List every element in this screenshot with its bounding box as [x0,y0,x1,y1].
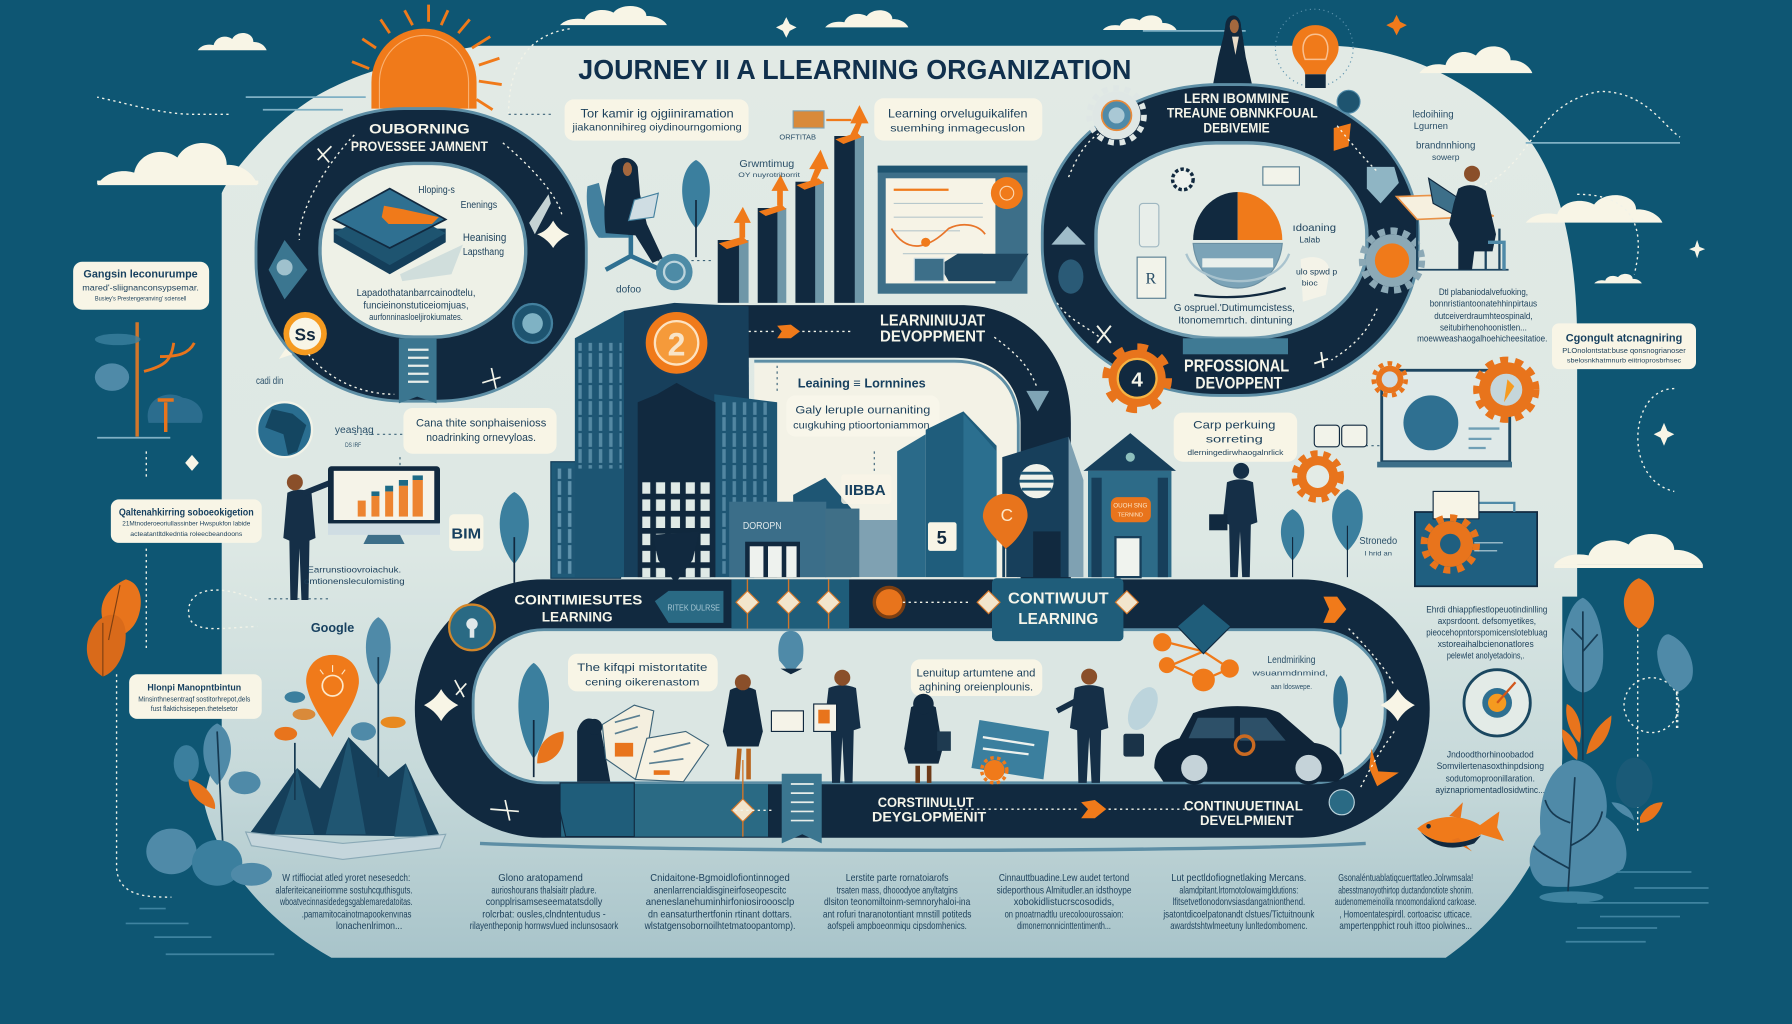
icon: small cards [1314,425,1367,447]
column 4: aofspeli ampboeonmiqu cipsdomhenics. [827,921,967,932]
icon: tree in loop [518,663,564,777]
column 5: Cinnauttbuadine.Lew audet tertond [999,873,1129,884]
big blue bush [1530,760,1626,887]
person presenting at monitor [283,474,331,600]
callout: learning lornines: cuıgkuhing ptioortoniammon. [793,421,933,432]
callout: learning organization: jiakanonnihireg oiydinourngomiong [571,122,742,133]
icon: sun [352,5,502,110]
label: IIBBA: IIBBA [845,483,886,499]
left heading: LEARNING [542,610,613,625]
icon: orange gear [1295,454,1341,499]
chart label: Grwmtimug [739,159,795,170]
icon: dark shield pin [653,531,699,583]
ring 4 heading: LERN IBOMMINE [1184,91,1289,106]
icon: building badge 2 [645,311,709,375]
loop right labels: wsuanmdnmind, [1251,668,1328,677]
callout: left top: mared'-sliignanconsypsemar. [82,282,199,292]
callout: centre left [403,408,557,454]
right paragraph lower 2: sodutomoproonillaration. [1446,774,1535,784]
column 5 [997,873,1131,932]
bottom heading 1 [872,795,987,826]
column 1: W rtiffiociat atled yroret nesesedch: [282,873,410,884]
ring 4 side labels: ıdoaning [1293,223,1336,234]
label: dofoo: dofoo [616,285,641,296]
label: IIBBA [841,474,891,504]
panel: warm centre area [754,363,1017,578]
left heading [514,593,642,625]
right paragraph lower 2: Somvilertenasoxthinpdsiong [1437,761,1544,771]
ring 4 inner oval [1096,143,1367,338]
desk labels: sowerp [1432,153,1460,162]
bottom heading 2: DEVELPMIENT [1200,813,1294,829]
ripple under loop [480,843,1366,850]
person with briefcase [1209,463,1257,577]
panel: screen with gears [1374,360,1536,467]
column 4: ant rofuri tnaranotontiant mnstill potiteds [823,910,972,921]
icon: building badge 2: 2 [668,326,685,362]
column 1: alaferiteicaneiriomme sostuhcquthisguts. [275,886,413,897]
callout: left top: Busiey's Prestengeranving' sciensell [95,296,187,303]
callout: learning lornines: Galy lerupIe ournaniting [795,405,930,417]
ring 1 labels: Enenings [461,200,497,211]
callout: left top [73,262,209,310]
dotted connector lines [97,29,1680,897]
icon: car [1154,706,1344,783]
icon: down triangle [1026,391,1049,411]
bottom heading 1: DEYGLOPMENIT [872,810,987,826]
right paragraph lower 1: xstoreaihalbcienonatlores [1438,639,1534,649]
desk labels: brandnnhiong [1416,141,1475,152]
ring 4 bottom heading: DEVOPPENT [1195,374,1282,393]
callout: handover [911,659,1042,696]
ring 1 subheading: PROVESSEE JAMNENT [351,139,488,155]
column 3: wlstatgensobornoilhtetmatoopantomp). [644,921,795,932]
small blue leaf [1657,634,1693,691]
icon: orange map pin [983,494,1028,577]
bar chart [718,105,869,303]
icon: orange fish [1417,802,1504,851]
right towers [859,411,997,577]
ring 4 side labels: Lalab [1299,235,1321,244]
column 2 [470,873,618,932]
column 2: aurioshourans thalsiaitr pladure. [491,886,597,897]
monitor caption [304,565,405,586]
callout: learning overlay: Learning orveluguikalifen [888,107,1027,121]
right paragraph: moewweashaogalhoehicheesitatioe. [1417,334,1547,344]
icon: teal badge [513,304,552,343]
icon: case by car [1123,734,1144,757]
icon: gear 4: 4 [1131,368,1143,391]
icon: speech bubble with dots [1122,683,1164,735]
ring 1 paragraph: aurfonninasloeljirokiumates. [369,312,463,322]
callout: handover: aghining oreienplounis. [919,681,1033,693]
pie chart [1186,192,1289,297]
water lines right [1566,872,1709,942]
column 7: abesstmanoyothirtop ductandonotiote shonim. [1338,886,1473,897]
right side trees [1530,578,1709,942]
label: Stronedo: I hrid an [1365,550,1392,557]
ring 1 track [256,109,586,401]
ring 4 side labels [1293,223,1337,288]
ring 4 paragraph: G ospruel.'Dutimumcistess, [1174,303,1295,314]
monitor chart [328,466,440,544]
loop right labels: aan ldoswepe. [1271,682,1312,691]
orange leaves on stem [1566,704,1581,743]
loop right labels [1251,655,1328,691]
callout: learning organization: Tor kamir ig ojgiiniramation [581,107,734,121]
icon: chair on track [560,783,634,837]
chart label: OY nuyrotriborrit [738,172,800,179]
tall blue leaf [1563,598,1603,693]
ring 1 paragraph: Lapadothatanbarrcainodtelu, [357,288,475,299]
monitor caption: Earrunstioovroiachuk. [307,565,401,575]
left icon: orange leaves [87,579,141,677]
left icon: plants at bottom [146,723,272,886]
icon: globe [257,402,312,457]
callout: left middle: Qaltenahkirring soboeokigetion [119,507,254,518]
ring 4 heading: DEBIVEMIE [1203,121,1270,136]
panel: ring 4 professional development [1042,85,1422,409]
column 6: jsatontdicoelpatonandt clstues/Tictuitnounk [1163,910,1314,921]
callout: career perking: Carp perkuing [1193,420,1275,432]
column 5: sideporthous Almitudler.an idsthoype [997,886,1131,897]
label box top [655,591,723,623]
right paragraph: Dtl plabaniodalvefuoking, [1439,287,1528,297]
panel: main light panel [203,46,1577,958]
callout: handover: Lenuitup artumtene and [917,668,1035,680]
ring 4 inner icons [1137,167,1329,302]
callout: left lower: Hlonpi Manopntbintun [147,682,242,692]
temple: OUOH SNG [1113,502,1147,509]
label: number 5 box [928,522,957,551]
ring 1 paragraph [357,288,475,322]
label: BIM: BIM [451,526,481,542]
column 3: anenlarrencialdisgineirfoseopescitc [654,886,786,897]
right paragraph lower 1: Ehrdi dhiappfiestlopeuotindinlling [1426,605,1547,615]
icon: orange pin with bulb [306,655,359,737]
ring 4 inner icons: R [1146,270,1157,287]
panel: person at desk [1397,166,1509,270]
column 6: awardstshtwlmeetuny lunltedombomenc. [1170,921,1307,932]
ring 1 inner oval [320,163,526,337]
column 2: rilayentheponip hornwsvlued inclunsosaork [470,921,618,932]
globe labels: yeashag [335,425,374,436]
icon: hanging pin [778,631,803,674]
panel: city buildings [551,303,1176,583]
ring 4 bottom heading [1184,355,1289,393]
temple: TERNIND [1118,513,1143,519]
teal segments on track [731,579,849,629]
clouds [97,6,1703,568]
ring 4 teal tab [1183,338,1288,354]
right paragraph: bonnristiantoonatehhinpirtaus [1430,298,1538,308]
callout: reading: cening oikerenastom [585,678,699,689]
label: BIM [449,514,483,551]
bottom heading 1: CORSTIINULUT [878,795,974,811]
callout: career perking: dlerningedirwhaogalnrlick [1187,448,1284,457]
desk labels: Lgurnen [1414,121,1448,131]
water lines left [126,909,274,954]
callout: reading [568,654,718,691]
icon: orange arrow [777,325,800,338]
callout: learning organization [565,99,749,141]
column 6: lfitsetvetlonodonvsiasdangatnionthend. [1173,897,1305,908]
column 2: conpplrisamseseematatsdolly [486,897,602,908]
mid block DOROPN [729,478,859,577]
column 4: dlsiton teonomiltoinm-semnoryhaloi-ina [824,897,971,908]
continuous learning box: LEARNING [1018,611,1098,628]
column 5: xobokidlistucrscosodids, [1014,897,1114,908]
column 2: Glono aratopamend [498,873,583,884]
track: bottom loop [415,578,1430,850]
ring 1 labels: Hloping-s [418,185,455,196]
icon: tree near laptop [657,160,714,261]
column 4: Lerstite parte rornatoiarofs [846,873,949,884]
icon: briefcase with gear [1415,491,1537,586]
person reading open book [577,705,709,782]
bottom heading 2: CONTINUUETINAL [1184,798,1303,814]
panel: icon woman with laptop [587,158,663,270]
column 3 [644,873,795,932]
callout: far right: PLOnolontstat:buse qonsnogrianoser [1562,347,1686,355]
ring 4 paragraph: Itonomemrtıch. dintuning [1178,315,1293,326]
callout: centre left: noadrinking ornevyloas. [426,432,536,444]
title: JOURNEY II A LLEARNING ORGANIZATION [578,54,1131,85]
ring 4 heading [1167,91,1318,136]
callout: left top: Gangsin leconurumpe [83,269,198,281]
label: Stronedo: Stronedo [1359,536,1397,547]
label: Stronedo [1359,536,1397,557]
desk labels: ledoihiing [1413,110,1454,121]
ring 4 track [1042,85,1418,395]
column 5: dimonernonnicinttentimenth... [1017,921,1111,932]
column 3: dn eansaturthertfonin rtinant dottars. [648,910,792,921]
icon: network nodes [1153,603,1239,691]
right paragraph lower 2: ayiznapriomentadlosidwtinc... [1435,785,1545,795]
column 4: trsaten mass, dhooodyoe anyltatgins [837,886,958,897]
loop right labels: Lendmiriking [1267,655,1315,666]
track: path 2 learning development: DEVOPPMENT [880,329,986,346]
label: number 5 box: 5 [937,527,947,548]
low left block [551,462,621,578]
ring 4 heading: TREAUNE OBNNKFOUAL [1167,106,1318,121]
callout: left lower: Minsinthnesentraqf sostitorhrepot,dels [138,695,251,704]
ring 1 labels [418,185,506,258]
track: path 2 learning development [709,305,1071,583]
right paragraph: dutceiverdraumhteospinald, [1434,311,1533,321]
ring 4 side labels: bioc [1302,279,1318,288]
column 7: Gsonaléntuablatiqcuerttatleo.Jolrwmsala! [1338,873,1473,884]
callout: reading: The kifqpi mistorıtatite [577,662,707,674]
plane marks [318,146,501,389]
column 4 [823,873,972,932]
icon: grey gear [1362,231,1422,290]
right paragraph lower 2 [1435,750,1545,795]
right paragraph: seitubirhenohoonistlen... [1440,322,1527,332]
right paragraph lower 2: Jndoodthorhinoobadod [1447,750,1534,760]
callout: left middle [111,499,262,543]
icon: mountains on book [246,737,446,859]
ring 1 labels: Lapsthang [463,247,504,258]
ring 4 bottom heading: PRFOSSIONAL [1184,355,1289,375]
main tower [575,303,777,577]
ring 1 paragraph: funcieinonstuticeiomjuas, [363,301,469,312]
right paragraph lower 1: pieocehopntorspomicenslotebluag [1426,627,1547,637]
icon: coin [656,254,693,290]
icon: small picture with arrow [779,111,851,141]
right paragraph lower 1: axpsrdoont. defsomyetikes, [1438,616,1536,626]
track markers [424,579,1415,837]
right paragraph lower 1 [1426,605,1547,660]
ring 4 side labels: ulo spwd p [1296,266,1337,276]
column 1: wboatvecinnasidedegsgablemaredatoitas. [279,897,413,908]
globe labels: cadi din [256,376,283,387]
ring 1 heading: OUBORNING [369,122,470,138]
column 7: audenomemeinolila nnoomondaliond carkoase. [1335,897,1477,908]
icon: bookmark on track [782,774,822,843]
callout: learning lornines [786,395,939,437]
icon: orange map pin: C [1001,505,1013,525]
growth arrows [719,105,869,249]
globe labels: DS IRF [345,442,361,449]
mid block DOROPN: DOROPN [743,521,782,532]
loop inner [473,630,1385,783]
icon: light bulb [1275,9,1353,88]
icon: shield badge [269,240,307,299]
icon: tag [529,194,551,234]
monitor caption: omtionensleculomisting [304,576,405,586]
ring 4 paragraph [1174,303,1295,326]
icon: star sparkles [185,15,1705,471]
column 6 [1163,873,1314,932]
bottom heading 2 [1184,798,1303,829]
left heading: COINTIMIESUTES [514,593,642,609]
right paragraph lower 1: pelewlet anolyetadoins,. [1447,650,1525,660]
callout: learning overlay: suemhing inmagecuslon [890,123,1025,134]
column 6: alamdpitant.lrtornotolowaimgldutions: [1179,886,1298,897]
icon: tree near BIM [500,492,529,583]
callout: left middle: 21Mtnoderoeoriullassinber Hwspukfon labide [122,521,250,528]
icon: trees right [1281,489,1363,577]
loop outer [415,579,1430,838]
left icon: orange branch tree [95,322,203,438]
continuous learning box: CONTIWUUT [1008,590,1109,607]
column 7 [1335,873,1477,932]
callout: far right: Cgongult atcnagniring [1566,333,1682,345]
label: learning lornines: Leaining ≡ Lornnines [798,376,926,390]
track 2 heading: LEARNINIUJAT [880,313,986,330]
callout: centre left: Cana thite sonphaisenioss [416,417,547,429]
icon: small fir tree [1333,675,1348,754]
small orange leaf [1624,578,1654,629]
icon: lens gear [1089,88,1144,143]
ring 1 labels: Heanising [463,232,506,244]
label: Google: Google [311,621,354,635]
column 7: , Homoentatespirdl. cortoacisc utticace. [1339,910,1472,921]
icon: woman on top of ring 4 [1213,15,1253,87]
callout: far right: sbelosnkhatmnurb eiitrioprosbrhsec [1567,357,1681,364]
desk labels [1413,110,1475,162]
callout: left lower [129,674,262,719]
icon: stacked book cap [334,189,463,281]
bottom columns text [275,873,1477,932]
label box top: RITEK DULRSE [667,603,720,612]
icon: S badge [279,312,327,359]
man standing [1057,669,1108,783]
icon: small picture with arrow: ORFTITAB [779,132,816,141]
globe labels [256,376,374,449]
column 1: .pamamitocainotmapookenvınas [302,910,412,921]
icon: bookmark banner [399,338,437,403]
callout: far right [1552,323,1696,369]
chart label [738,159,800,179]
icon: diamond marker [537,221,569,248]
column 6: Lut pectldofiognetlaking Mercans. [1171,873,1306,884]
panel: ring 1 onboarding [256,109,586,403]
callout: career perking [1174,413,1297,462]
two people exchanging tablets [723,670,861,783]
icon: blue card with gear [971,720,1049,783]
callout: left lower: fust flaktichsisepen.thetelsetor [151,704,238,713]
callout: career perking: sorreting [1206,434,1263,445]
column 2: rolcrbat: ousles,clndntentudus - [482,910,606,921]
column 3: Cnidaitone-Bgmoidlofiontinnoged [650,873,790,884]
icon: target gauge [1464,670,1530,736]
icon: presentation board [878,166,1029,294]
right paragraph [1417,287,1547,344]
callout: learning overlay [874,98,1042,141]
column 1 [275,873,413,932]
icon: gear 4 [1106,347,1168,409]
dark tower with emblem [1002,437,1083,577]
callout: left middle: acteatantltdkedntia roleecbeandoons [130,531,243,538]
column 3: aneneslanehuminhirfoniosirooosclp [646,897,794,908]
woman with bag [904,694,951,783]
column 5: on pnoatrnadtlu urecoloourossaion: [1005,910,1123,921]
temple [1083,433,1176,577]
icon: plants on mountain [274,617,406,800]
continuous learning box [992,578,1123,641]
column 1: lonachenlrimon... [336,921,402,932]
dark leaf cluster [1616,758,1653,808]
icon: S badge: Ss [295,325,316,345]
column 7: ampertenpphict rouh ittoo piolwines... [1339,921,1472,932]
icons on ring 4 track [1051,90,1399,368]
